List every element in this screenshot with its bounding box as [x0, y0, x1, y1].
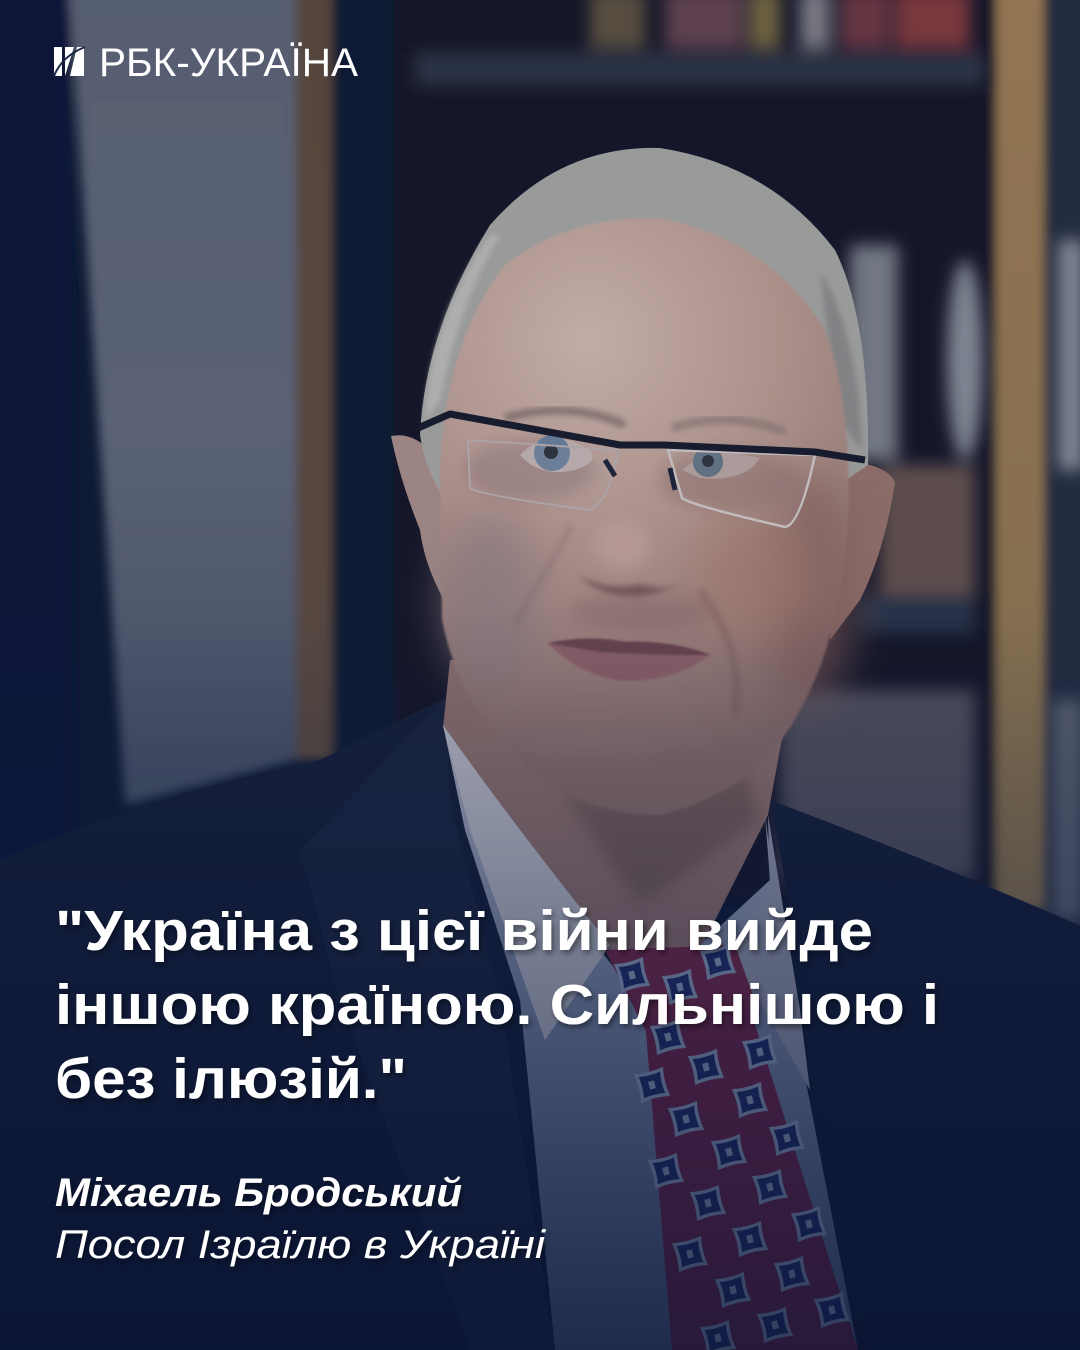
logo wordmark: РБК-УКРАЇНА — [99, 41, 358, 85]
eyebrows — [505, 410, 625, 425]
quote headline: іншою країною. Сильнішою і — [55, 973, 939, 1037]
face shading — [440, 440, 855, 715]
attribution: speaker name and role: Посол Ізраїлю в Україні — [55, 1223, 546, 1267]
logo icon — [54, 47, 85, 76]
right ear — [830, 462, 895, 640]
attribution: speaker name and role — [55, 1171, 546, 1267]
glasses — [418, 414, 865, 527]
attribution: speaker name and role: Міхаель Бродський — [55, 1171, 462, 1215]
nose — [578, 572, 692, 596]
mouth — [548, 639, 710, 681]
quote headline: без ілюзій." — [55, 1047, 407, 1111]
logo: RBC-Ukraine — [54, 41, 358, 85]
quote headline — [55, 899, 939, 1111]
jacket lapel — [300, 698, 555, 1350]
hair — [420, 148, 868, 500]
necktie — [605, 944, 858, 1350]
neck — [443, 640, 800, 950]
quote headline: "Україна з цієї війни вийде — [55, 899, 873, 963]
shirt and collar — [443, 725, 858, 1350]
eyes — [520, 439, 593, 472]
face — [440, 218, 849, 815]
jacket — [0, 698, 1080, 1350]
left ear — [391, 435, 450, 610]
